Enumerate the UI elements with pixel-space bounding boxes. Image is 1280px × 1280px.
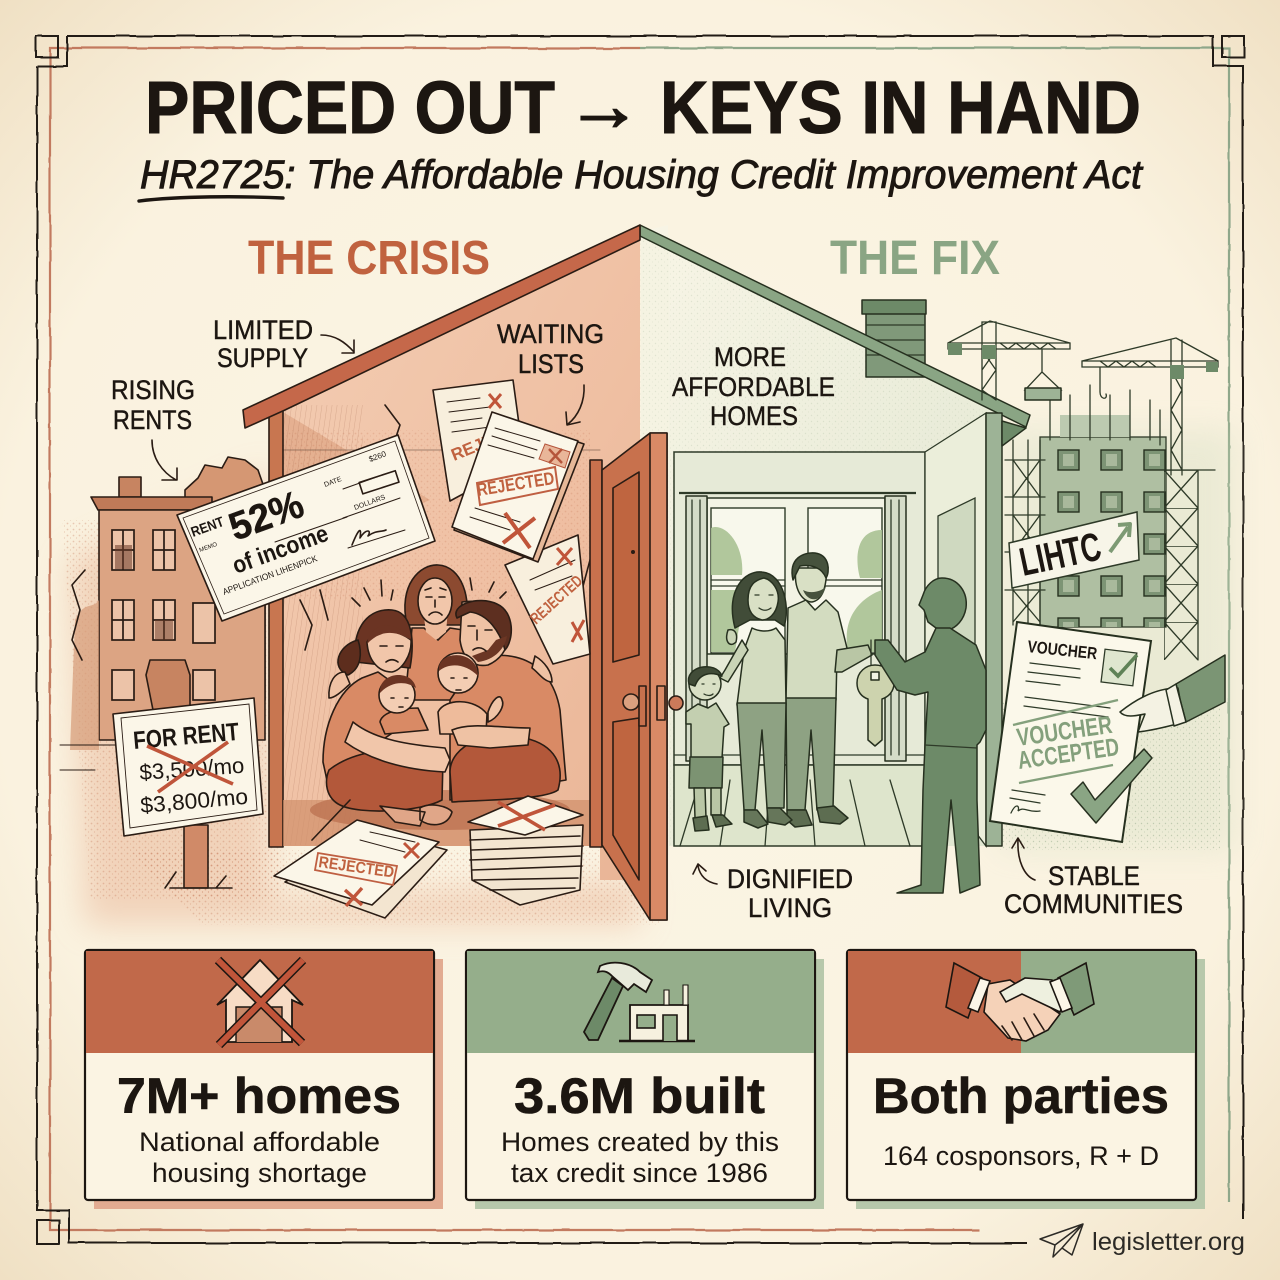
label: more affordable homes: AFFORDABLE — [672, 372, 835, 402]
bare feet — [380, 805, 452, 826]
label: rising rents with arrow — [111, 375, 195, 480]
for rent sign: $3,500/mo — [139, 753, 245, 785]
stat card: homes built — [466, 950, 824, 1209]
stat card: housing shortage: National affordable — [139, 1127, 380, 1157]
stat card: bipartisan support: 164 cosponsors, R + D — [883, 1141, 1159, 1171]
baby one — [380, 708, 428, 734]
label: waiting lists with arrow: WAITING — [497, 319, 604, 349]
crane one — [948, 321, 1070, 400]
crane two — [1082, 338, 1218, 475]
mother — [355, 610, 412, 668]
stat card: homes built: 3.6M built — [514, 1068, 765, 1124]
stat card: homes built: Homes created by this — [501, 1127, 779, 1157]
rent check: 52% of income: MEMO — [199, 542, 219, 554]
label: dignified living with arrow — [693, 864, 853, 923]
chimney — [862, 300, 926, 377]
voucher document: VOUCHER — [1027, 637, 1098, 663]
large check mark — [1071, 749, 1152, 823]
rent check: 52% of income — [177, 435, 435, 621]
icon: handshake — [946, 963, 1094, 1041]
label: stable communities with arrow: COMMUNITIES — [1004, 889, 1183, 919]
icon: hammer and building — [584, 963, 695, 1041]
title: KEYS IN HAND — [660, 66, 1141, 149]
stat card: bipartisan support: Both parties — [873, 1068, 1169, 1124]
label: waiting lists with arrow: LISTS — [518, 349, 584, 379]
title: PRICED OUT — [145, 66, 555, 149]
house: right fix interior — [640, 225, 1000, 855]
right family with keys — [686, 553, 872, 831]
rent check: 52% of income: DATE — [323, 476, 343, 489]
stat card: housing shortage: housing shortage — [152, 1158, 367, 1188]
stat card: bipartisan support — [847, 950, 1205, 1209]
icon: crossed-out house — [217, 960, 303, 1045]
rent check: 52% of income: $260 — [368, 449, 388, 464]
rejected papers and stack on floor: REJECTED — [317, 854, 395, 882]
side wall — [925, 413, 986, 846]
rent check: 52% of income: RENT — [189, 513, 226, 540]
label: dignified living with arrow: DIGNIFIED — [727, 864, 853, 894]
label: more affordable homes: MORE — [714, 342, 786, 372]
hand holding voucher — [1120, 655, 1225, 732]
rejected application papers on the wall: REJEC — [448, 426, 508, 465]
building windows — [112, 530, 215, 700]
tower block — [1040, 437, 1166, 627]
wall cracks — [300, 405, 590, 650]
for rent sign — [113, 698, 263, 888]
for rent sign: FOR RENT — [132, 718, 240, 755]
construction site — [948, 321, 1218, 660]
section heading: the fix: THE FIX — [830, 232, 1000, 285]
footer brand: legisletter.org: legisletter.org — [1092, 1228, 1245, 1256]
label: waiting lists with arrow — [497, 319, 604, 425]
house: left crisis interior — [269, 232, 640, 880]
mother — [737, 628, 786, 705]
label: limited supply with arrow: SUPPLY — [217, 343, 308, 373]
stat card: housing shortage — [85, 950, 443, 1209]
back woman — [405, 565, 467, 625]
rejected application papers on the wall — [433, 380, 590, 664]
rejected application papers on the wall: REJECTED — [475, 468, 556, 500]
paper stack — [470, 825, 583, 905]
voucher document — [990, 622, 1152, 842]
son — [686, 703, 729, 758]
crisis family huddled on floor — [310, 565, 570, 840]
for rent sign: $3,800/mo — [139, 784, 249, 818]
label: stable communities with arrow — [1004, 838, 1183, 919]
subtitle: HR2725: The Affordable Housing Credit Improvement Act — [140, 153, 1144, 197]
label: rising rents with arrow: RISING — [111, 375, 195, 405]
voucher document: VOUCHER — [1015, 711, 1114, 752]
rejected application papers on the wall: REJECTED — [527, 573, 586, 628]
label: limited supply with arrow: LIMITED — [213, 315, 313, 345]
LIHTC banner: LIHTC — [1016, 525, 1105, 585]
rejected papers and stack on floor — [274, 796, 583, 918]
label: more affordable homes: HOMES — [710, 401, 798, 431]
label: dignified living with arrow: LIVING — [748, 893, 832, 923]
back wall — [674, 452, 925, 765]
worry marks — [352, 578, 506, 606]
scaffolding — [1005, 440, 1045, 625]
stat card: housing shortage: 7M+ homes — [117, 1068, 401, 1124]
rent check: 52% of income: APPLICATION LIHENPICK — [221, 553, 319, 597]
title: → — [566, 66, 642, 146]
open door — [590, 433, 683, 920]
footer brand: legisletter.org — [1040, 1224, 1245, 1257]
baby two — [438, 702, 487, 734]
key being handed over — [857, 640, 894, 746]
father — [786, 600, 847, 700]
window with garden view — [679, 493, 916, 761]
voucher document: ACCEPTED — [1016, 733, 1121, 775]
landlord silhouette — [875, 578, 986, 893]
section heading: the crisis: THE CRISIS — [248, 232, 490, 285]
brick tenement building — [60, 457, 265, 770]
label: more affordable homes — [672, 342, 835, 431]
label: rising rents with arrow: RENTS — [113, 405, 192, 435]
floor — [674, 765, 925, 846]
label: stable communities with arrow: STABLE — [1048, 861, 1140, 891]
house roof — [243, 225, 1030, 846]
rent check: 52% of income: DOLLARS — [353, 494, 387, 512]
washes behind the scene — [62, 430, 1235, 925]
rent check: 52% of income: 52% — [223, 483, 309, 549]
label: limited supply with arrow — [213, 315, 354, 373]
title — [145, 66, 1141, 149]
father — [450, 655, 566, 800]
stat card: homes built: tax credit since 1986 — [511, 1158, 768, 1188]
rent check: 52% of income: of income — [229, 520, 332, 580]
